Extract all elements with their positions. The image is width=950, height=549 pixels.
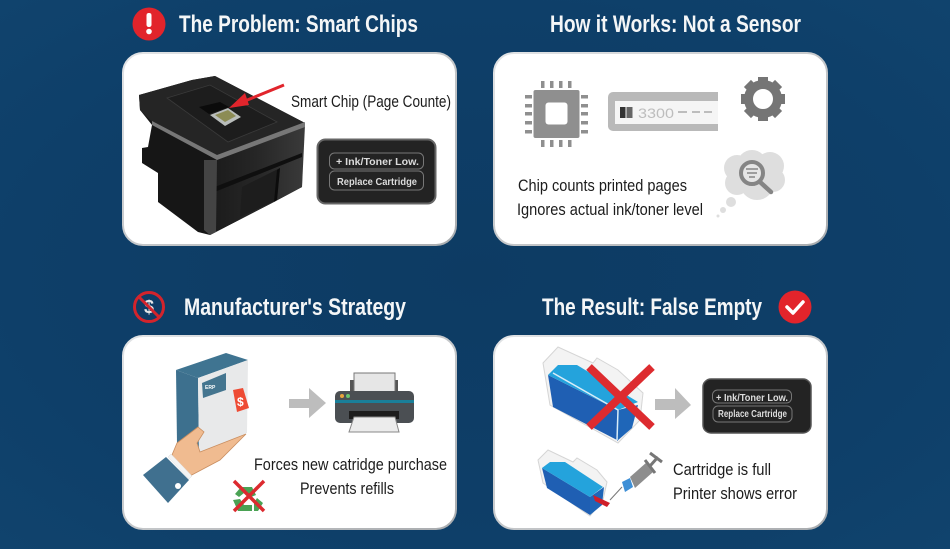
illustration: black cartridge with chip <box>139 76 305 235</box>
arrow: box to printer <box>289 388 326 418</box>
arrow: points to chip <box>229 85 284 108</box>
text: strategy: Prevents refills <box>300 480 394 498</box>
icon: no dollar <box>134 292 164 322</box>
text: result: Cartridge is full <box>673 461 771 479</box>
heading: the result: The Result: False Empty <box>542 294 763 321</box>
icon: thought bubble with magnifier <box>716 150 785 218</box>
icon: crossed recycle <box>233 481 264 511</box>
panel: how it works <box>494 11 827 245</box>
price tag <box>233 388 249 412</box>
illustration: small cartridge with syringe <box>538 450 662 516</box>
icon: red check <box>778 290 812 324</box>
heading: manufacturer's strategy: Manufacturer's Strategy <box>184 294 407 321</box>
heading: the problem: The Problem: Smart Chips <box>179 11 418 38</box>
status panel: ink low <box>703 379 811 433</box>
icon: gear <box>732 68 794 130</box>
heading: how it works: How it Works: Not a Sensor <box>550 11 801 38</box>
panel: the result <box>494 290 827 529</box>
text: strategy <box>254 456 447 498</box>
text: how it works: Chip counts printed pages <box>518 177 687 195</box>
status panel: ink low: + Ink/Toner Low. <box>716 392 788 404</box>
icon: red exclamation <box>132 8 166 40</box>
price tag: $ <box>237 395 244 409</box>
icon: microchip <box>525 81 588 147</box>
panel: the problem <box>123 8 456 245</box>
card: the problem <box>123 53 456 245</box>
icon: no dollar: $ <box>144 297 154 317</box>
card: how it works <box>494 53 827 245</box>
illustration: hand holding box: ERP <box>205 385 216 391</box>
status panel: ink low: Replace Cartridge <box>718 408 787 420</box>
panel: manufacturer's strategy <box>123 292 456 529</box>
counter display <box>608 92 718 131</box>
status panel: ink low: + Ink/Toner Low. <box>336 156 419 168</box>
status panel: ink low: Replace Cartridge <box>337 176 417 188</box>
status panel: ink low <box>318 140 436 204</box>
counter display: 3300 <box>638 105 674 121</box>
card: the result <box>494 336 827 529</box>
card: manufacturer's strategy <box>123 336 456 529</box>
arrow: cartridge to status <box>655 388 691 419</box>
text: result <box>673 461 797 503</box>
icon: printer <box>335 373 414 432</box>
text: how it works: Ignores actual ink/toner level <box>517 201 703 219</box>
text: result: Printer shows error <box>673 485 797 503</box>
illustration: hand holding box <box>143 353 249 503</box>
text: strategy: Forces new catridge purchase <box>254 456 447 474</box>
label: smart chip: Smart Chip (Page Counte) <box>291 93 451 111</box>
illustration: large cartridge crossed out <box>543 347 652 443</box>
text: how it works <box>517 177 703 219</box>
